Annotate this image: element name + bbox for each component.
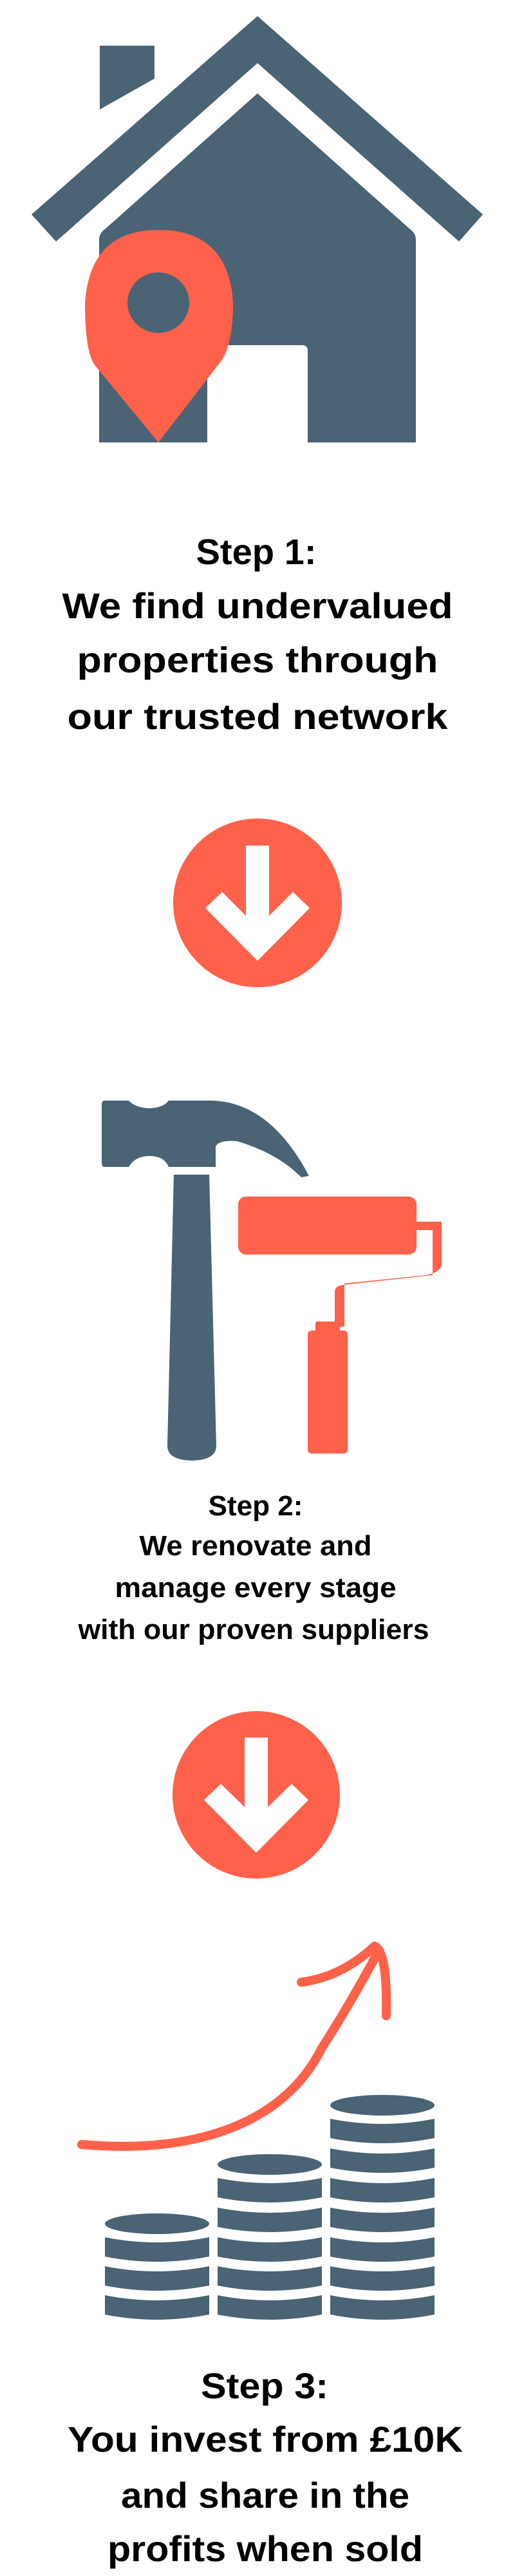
- icon: location pin: [85, 230, 233, 442]
- text: step 2: manage every stage: [115, 1572, 397, 1604]
- coin stack 1: [105, 2213, 209, 2320]
- text: step 2: We renovate and: [139, 1530, 372, 1562]
- icon: house with location pin: [32, 16, 483, 442]
- coin stack 3: [330, 2095, 435, 2320]
- text: step 1: We find undervalued: [62, 585, 453, 626]
- coin stack 2: [218, 2154, 322, 2320]
- text: step 2: Step 2:: [209, 1490, 303, 1522]
- text: step 1: our trusted network: [67, 696, 448, 737]
- icon: hammer: [102, 1101, 309, 1461]
- text: step 2: [77, 1490, 429, 1645]
- text: step 1: [62, 531, 453, 737]
- text: step 1: Step 1:: [196, 531, 317, 572]
- icon: coin stacks: [105, 2095, 435, 2320]
- arrow: down 1: [173, 819, 342, 987]
- text: step 3: and share in the: [121, 2475, 409, 2515]
- text: step 3: [68, 2365, 463, 2569]
- text: step 1: properties through: [77, 639, 438, 680]
- icon: rising trend arrow: [82, 1946, 386, 2146]
- text: step 2: with our proven suppliers: [77, 1614, 429, 1645]
- text: step 3: profits when sold: [108, 2528, 423, 2569]
- text: step 3: Step 3:: [201, 2365, 328, 2406]
- icon: paint roller: [238, 1197, 442, 1454]
- text: step 3: You invest from £10K: [68, 2419, 463, 2459]
- arrow: down 2: [173, 1711, 340, 1879]
